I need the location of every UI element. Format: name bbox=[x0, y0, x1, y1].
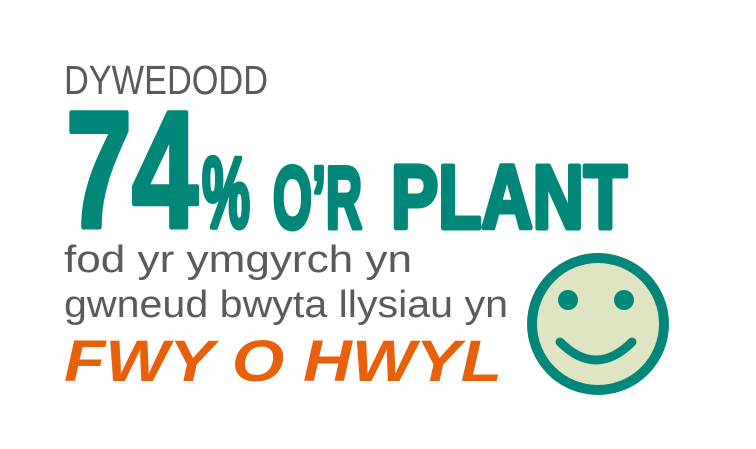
icon: smiley bbox=[532, 258, 664, 390]
body text: gwneud bwyta llysiau yn bbox=[64, 284, 508, 326]
headline: 74% o'r plant bbox=[66, 78, 627, 263]
body text bbox=[64, 239, 508, 326]
headline: 74% o'r plant: 74 bbox=[66, 78, 198, 263]
heading: dywedodd: DYWEDODD bbox=[64, 57, 268, 103]
highlight: fwy o hwyl: FWY O HWYL bbox=[64, 329, 502, 394]
headline: 74% o'r plant: PLANT bbox=[391, 148, 627, 248]
headline: 74% o'r plant: O’R bbox=[273, 148, 362, 247]
body text: fod yr ymgyrch yn bbox=[64, 239, 412, 281]
headline: 74% o'r plant: % bbox=[202, 137, 250, 249]
